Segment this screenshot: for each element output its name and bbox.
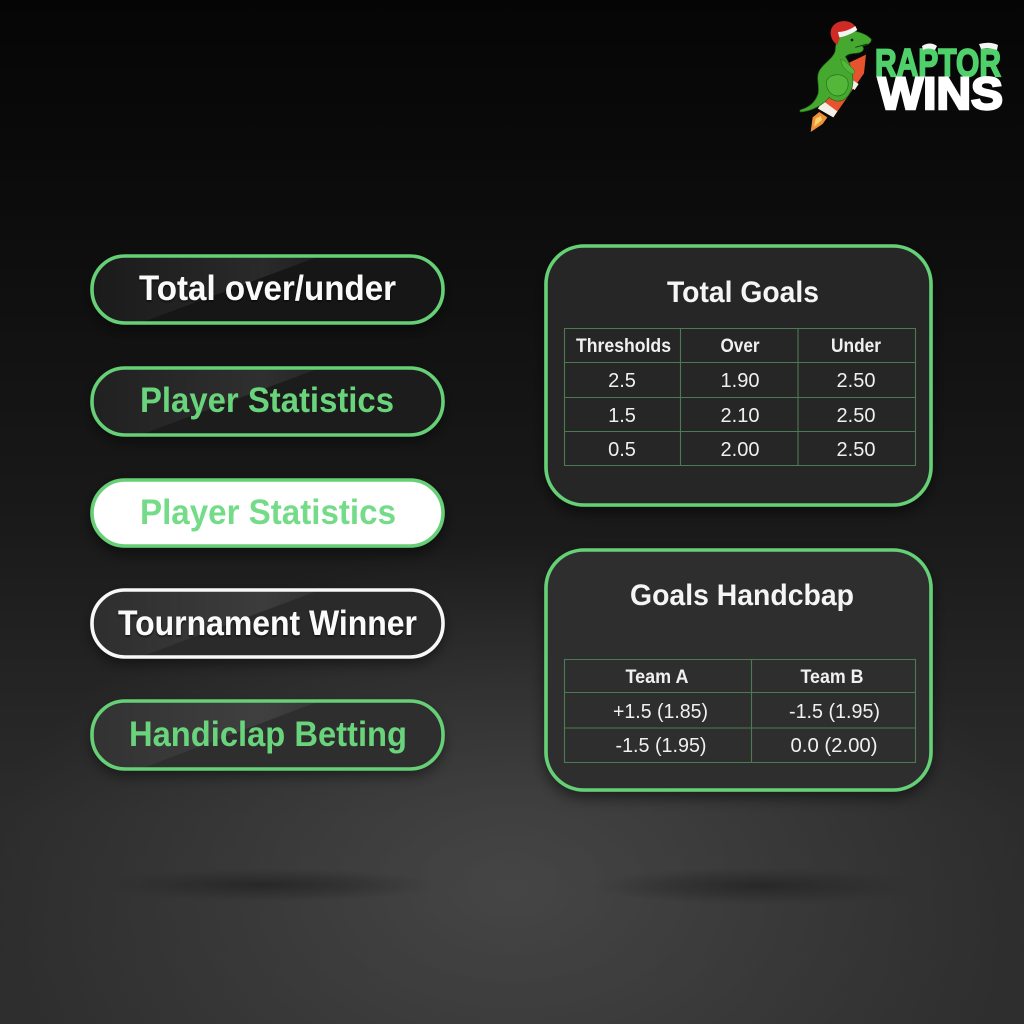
table: goals handicap odds: -1.5 (1.95) <box>789 701 880 723</box>
table: total goals odds: 2.50 <box>837 370 875 392</box>
table: goals handicap odds: +1.5 (1.85) <box>613 701 708 723</box>
table: total goals odds: Under <box>831 336 882 357</box>
table: goals handicap odds: Team B <box>800 667 864 688</box>
heading: Total Goals: Total Goals <box>667 276 819 309</box>
logo: Raptor Wins <box>800 21 1003 132</box>
logo word: WINS: WINS <box>878 68 1003 119</box>
button: Player Statistics green: Player Statistics <box>140 381 394 420</box>
icon: raptor on rocket <box>800 21 871 132</box>
table: goals handicap odds: 0.0 (2.00) <box>790 735 878 757</box>
table: goals handicap odds <box>564 660 916 762</box>
button: Player Statistics green <box>92 368 443 435</box>
table: total goals odds: 2.50 <box>837 405 875 427</box>
table: total goals odds: 1.90 <box>721 370 759 392</box>
table: total goals odds: 2.50 <box>837 439 875 461</box>
button: Total over/under <box>92 256 443 323</box>
heading: Goals Handcbap: Goals Handcbap <box>630 579 854 612</box>
floor shadow left <box>87 868 437 902</box>
panel: Total Goals <box>546 246 931 505</box>
table: total goals odds: 2.5 <box>608 370 636 392</box>
table: total goals odds: Over <box>720 336 760 357</box>
table: goals handicap odds: -1.5 (1.95) <box>616 735 706 757</box>
table: total goals odds: 2.10 <box>721 405 759 427</box>
button: Total over/under: Total over/under <box>139 269 396 308</box>
snow on logo <box>922 43 998 50</box>
button: Player Statistics white <box>92 480 443 546</box>
table: total goals odds: 0.5 <box>608 439 636 461</box>
button: Handiclap Betting <box>92 701 443 769</box>
button: Handiclap Betting: Handiclap Betting <box>129 715 407 754</box>
table: total goals odds: 1.5 <box>608 405 636 427</box>
button: Tournament Winner <box>92 590 443 657</box>
table: total goals odds: 2.00 <box>721 439 759 461</box>
floor shadow right <box>592 867 932 905</box>
table: total goals odds <box>564 328 916 466</box>
button: Player Statistics white: Player Statistics <box>140 493 396 532</box>
button: Tournament Winner: Tournament Winner <box>118 604 417 643</box>
table: total goals odds: Thresholds <box>576 336 671 357</box>
panel: Goals Handicap <box>546 550 931 790</box>
table: goals handicap odds: Team A <box>626 667 689 688</box>
